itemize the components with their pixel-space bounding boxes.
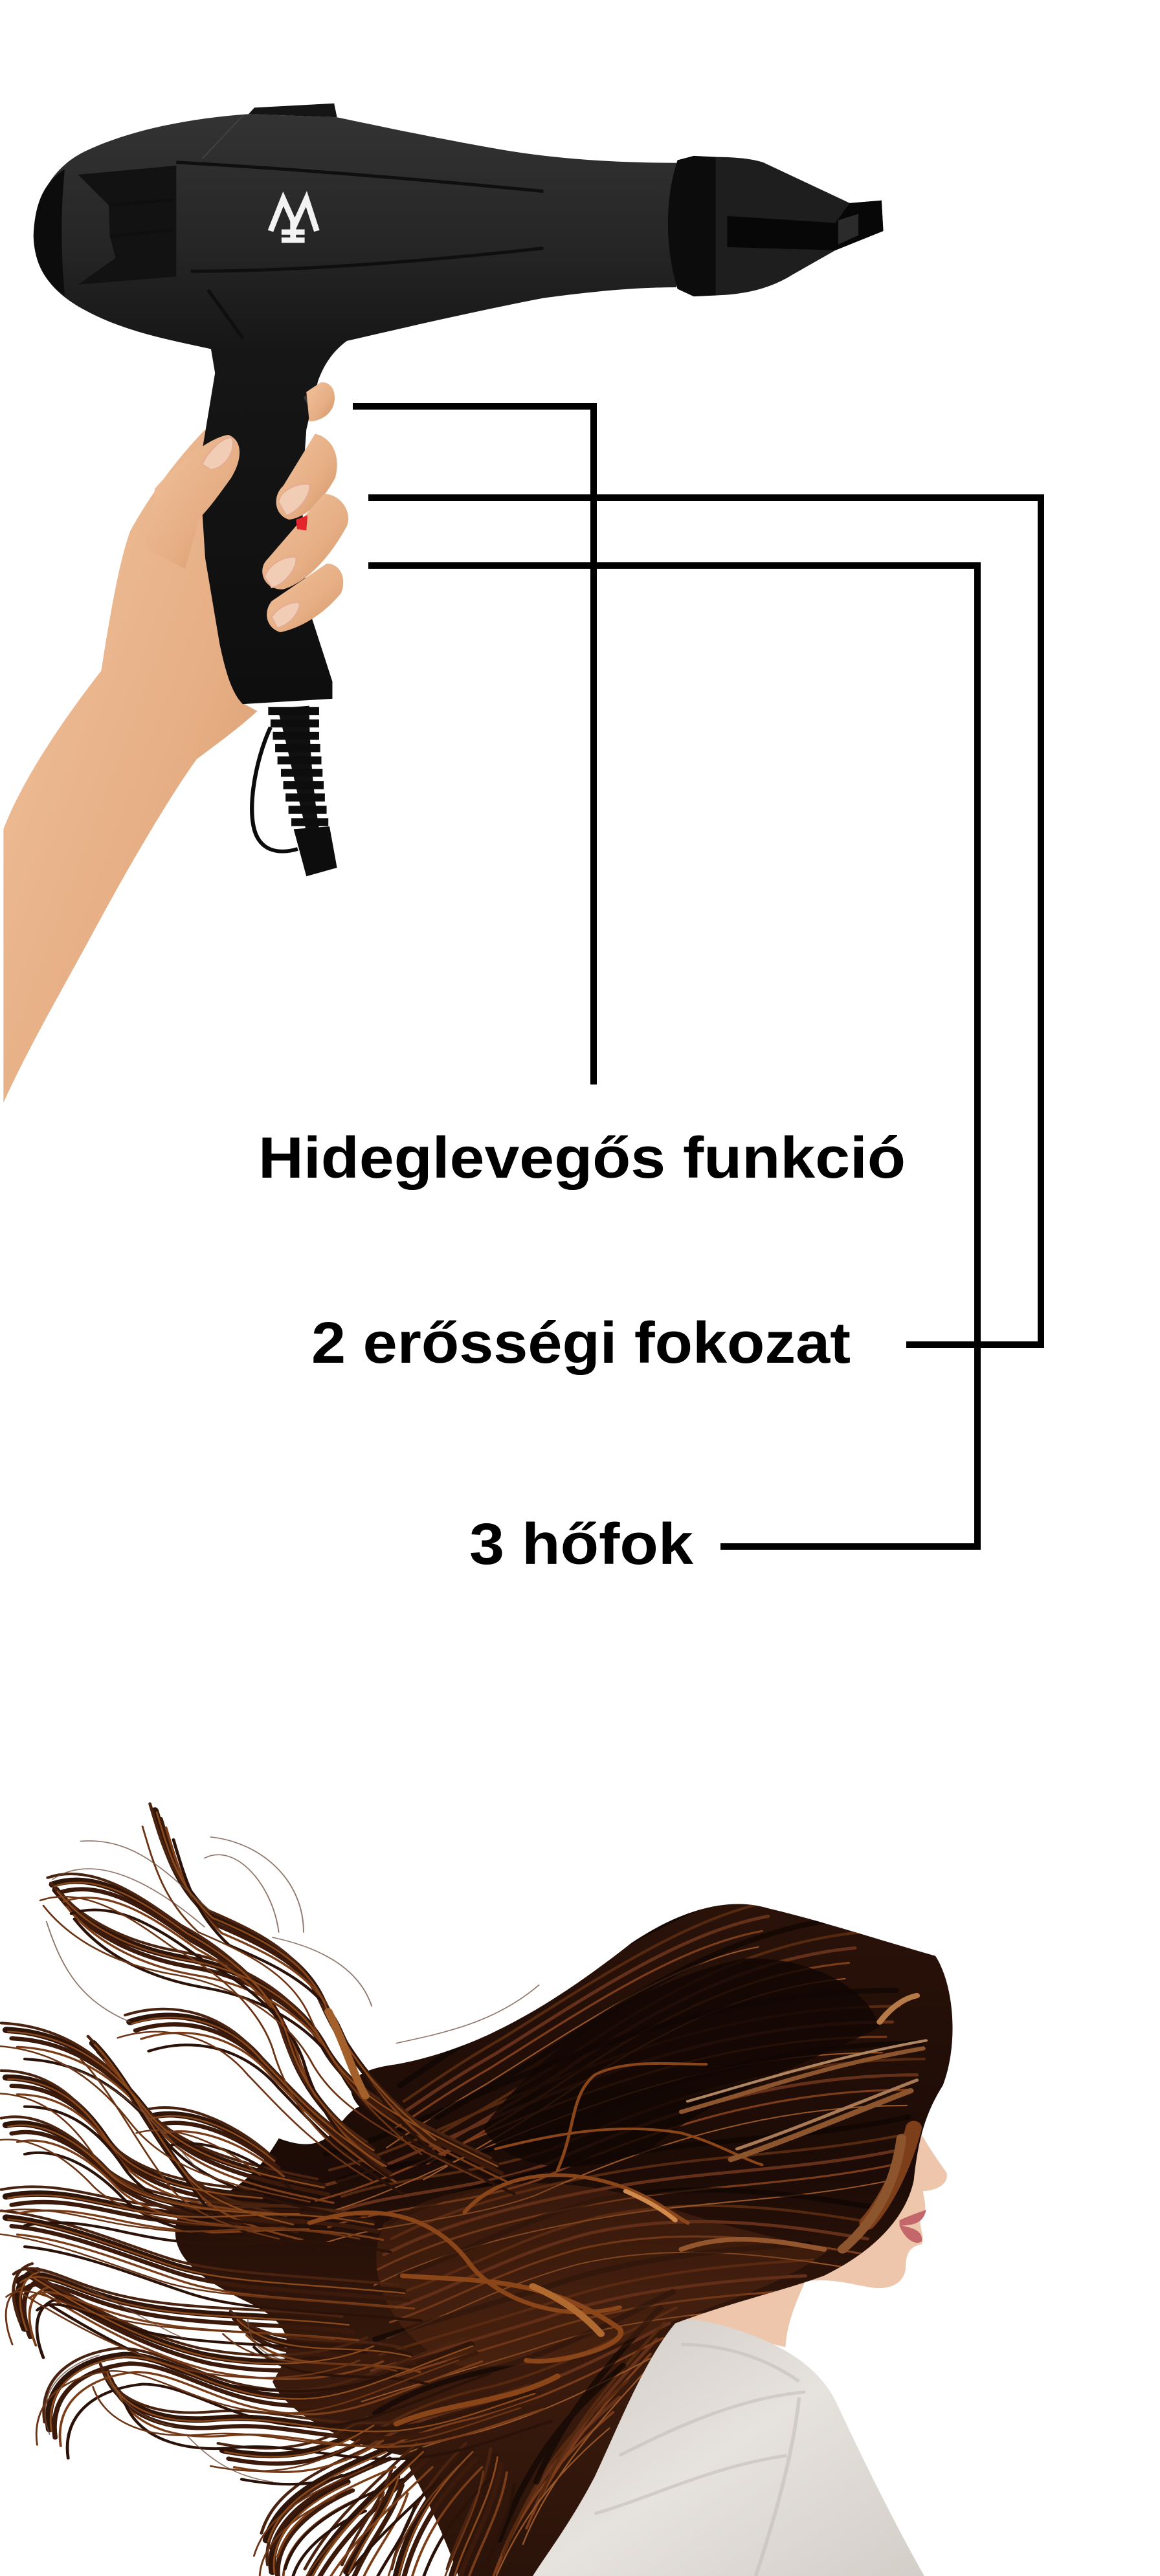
shirt	[533, 2319, 924, 2576]
cable loop	[252, 727, 298, 852]
spiral cord guard	[268, 706, 337, 876]
flowing strands inside hair mass	[312, 1884, 924, 2576]
switch	[304, 386, 321, 411]
neck and face	[682, 2117, 947, 2347]
collar	[668, 156, 717, 296]
highlight strands	[310, 1996, 917, 2424]
label: three heat levels: 3 hőfok	[469, 1512, 694, 1577]
thumb	[144, 435, 240, 569]
connector line: power levels	[368, 498, 1041, 1345]
label: two power levels: 2 erősségi fokozat	[311, 1311, 851, 1376]
dryer body	[34, 114, 676, 704]
fingers	[144, 382, 348, 632]
hair main mass	[175, 1904, 953, 2576]
hair dryer held in hand	[3, 104, 884, 1103]
hand and arm	[3, 430, 257, 1103]
rear vent	[78, 166, 176, 285]
nails	[203, 437, 309, 628]
hair framing the face	[682, 2040, 926, 2249]
logo	[271, 199, 317, 242]
brown lower hair tones	[376, 2183, 830, 2366]
shirt folds	[595, 2344, 805, 2576]
strand locks in the flying hair	[0, 1803, 552, 2576]
nozzle	[716, 157, 884, 295]
dark hair core	[483, 1959, 880, 2166]
red button	[296, 515, 307, 531]
lips	[900, 2210, 926, 2243]
label: cold air function: Hideglevegős funkció	[258, 1126, 906, 1191]
top button	[249, 104, 337, 117]
connector line: heat levels	[368, 566, 977, 1547]
woman with flowing hair	[0, 1803, 953, 2576]
connector line: cold air	[353, 406, 594, 1084]
body ridges	[110, 162, 543, 338]
fine flyaway strands	[37, 1837, 539, 2482]
